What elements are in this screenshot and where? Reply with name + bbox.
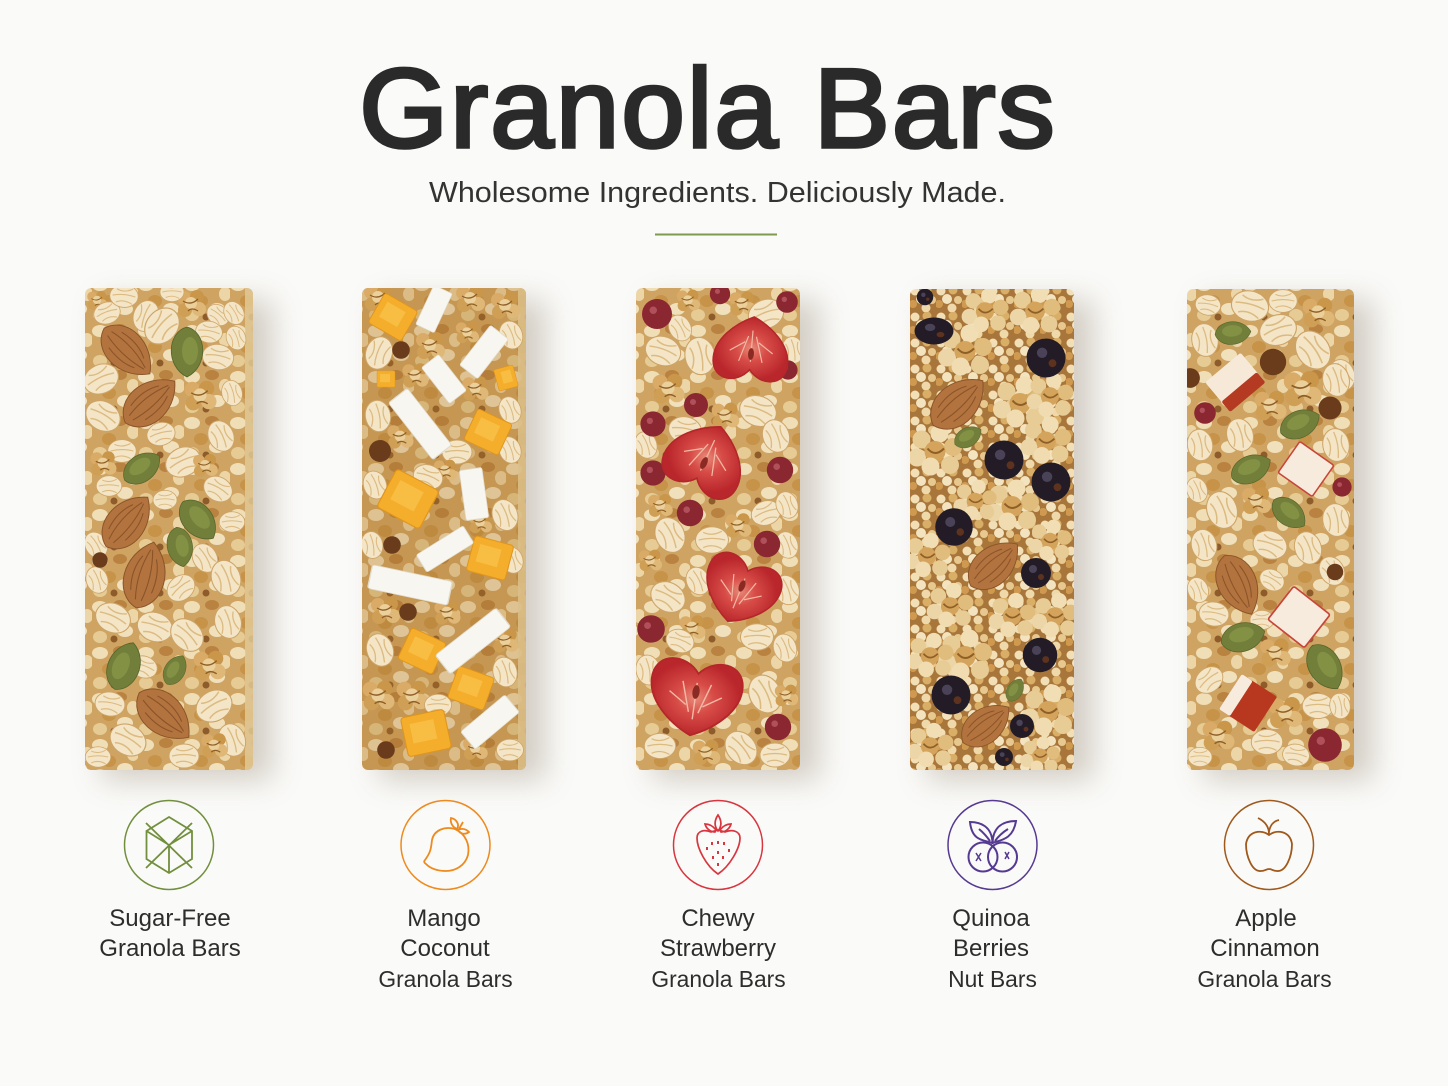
panel: sugar-free granola bar bbox=[79, 282, 272, 962]
bar shadow bbox=[1204, 300, 1373, 780]
bar: sugar-free bbox=[79, 282, 253, 770]
label: Granola Bars bbox=[99, 935, 241, 962]
title: Granola Bars bbox=[359, 46, 1057, 171]
label: Apple bbox=[1235, 905, 1297, 932]
icon: mango bbox=[401, 800, 490, 890]
label bbox=[948, 905, 1037, 992]
label: Granola Bars bbox=[1197, 966, 1332, 992]
label: Mango bbox=[407, 905, 481, 932]
bar shadow bbox=[927, 300, 1093, 780]
bar shadow bbox=[653, 300, 819, 780]
panel: chewy strawberry granola bar bbox=[631, 284, 819, 992]
label: Strawberry bbox=[660, 935, 776, 962]
bar: mango coconut bbox=[359, 284, 527, 770]
label: Quinoa bbox=[952, 905, 1030, 932]
bar shadow bbox=[379, 300, 545, 780]
icon: strawberry bbox=[674, 800, 762, 890]
title divider bbox=[655, 234, 777, 236]
bar: quinoa berries bbox=[904, 286, 1078, 774]
icon: no sugar cube bbox=[124, 800, 214, 890]
label: Coconut bbox=[400, 935, 490, 962]
panel: quinoa berries nut bar bbox=[904, 286, 1093, 992]
bar: apple cinnamon bbox=[1180, 287, 1359, 770]
subtitle: Wholesome Ingredients. Deliciously Made. bbox=[429, 177, 1006, 209]
icon: apple bbox=[1224, 800, 1314, 890]
panel: mango coconut granola bar bbox=[359, 284, 545, 992]
label: Berries bbox=[953, 935, 1029, 962]
label: Granola Bars bbox=[378, 966, 513, 992]
panel: apple cinnamon granola bar bbox=[1180, 287, 1373, 992]
apple chunk with red skin bbox=[1219, 674, 1277, 732]
label bbox=[99, 905, 241, 962]
icon: berries and leaves bbox=[948, 800, 1037, 890]
label: Granola Bars bbox=[651, 966, 786, 992]
label: Chewy bbox=[681, 905, 755, 932]
label: Cinnamon bbox=[1210, 935, 1320, 962]
label: Nut Bars bbox=[948, 966, 1037, 992]
label bbox=[1197, 905, 1332, 992]
bar: chewy strawberry bbox=[631, 284, 806, 771]
bar shadow bbox=[102, 300, 272, 780]
label: Sugar-Free bbox=[109, 905, 231, 932]
label bbox=[651, 905, 786, 992]
label bbox=[378, 905, 513, 992]
